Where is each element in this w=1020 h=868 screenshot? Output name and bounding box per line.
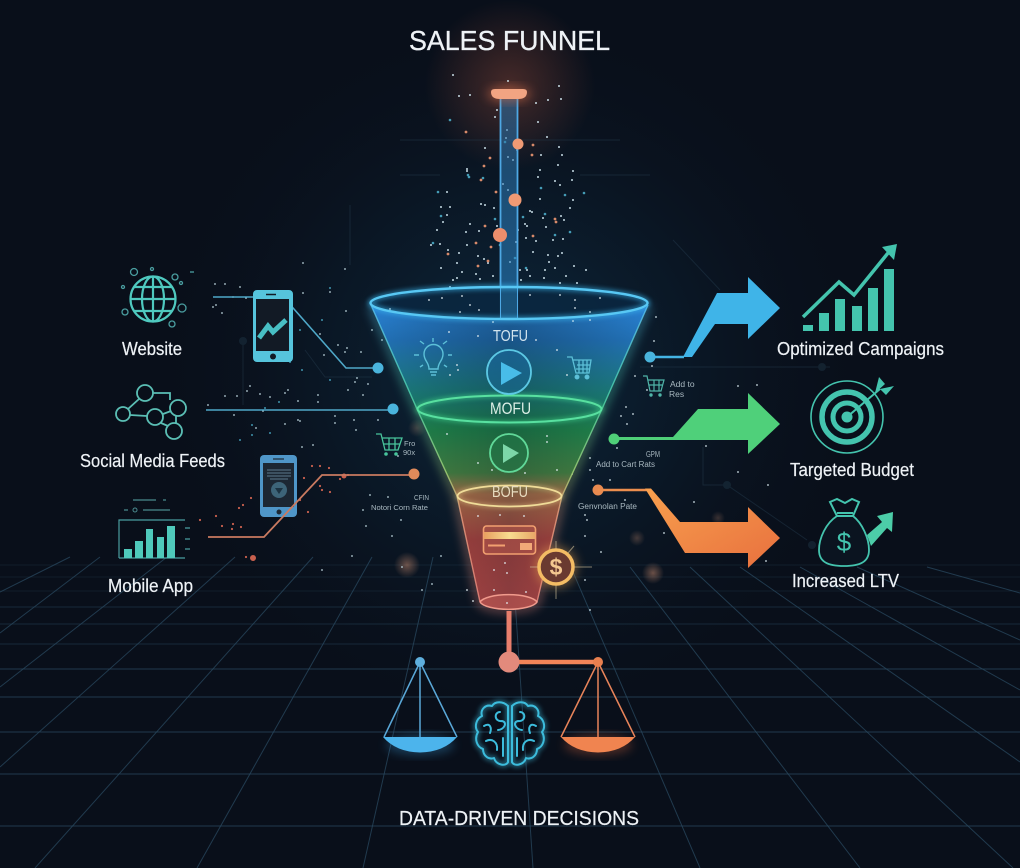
particles: right side [572, 317, 768, 610]
icon: mofu play button [490, 434, 528, 472]
small label: conversion rate: Genvnolan Pate [578, 502, 638, 511]
small label: add to cart rate: GPM [646, 450, 660, 459]
small label: cfin rate [371, 493, 429, 512]
small label: add to cart rate: Add to Cart Rats [596, 460, 655, 469]
tier ring: bofu [458, 486, 562, 506]
small label: add to rate with cart [643, 376, 695, 399]
small label: cart with rate: 90x [403, 448, 415, 457]
particles: left side [200, 263, 441, 590]
label: social media feeds: Social Media Feeds [80, 451, 225, 471]
icon: globe [122, 268, 194, 327]
title: SALES FUNNEL [409, 25, 610, 56]
icon: light bulb [414, 338, 452, 375]
perspective floor grid [0, 557, 1020, 868]
label: optimized campaigns: Optimized Campaigns [777, 339, 944, 359]
icon: credit card [484, 526, 536, 554]
tier ring: mofu [418, 396, 602, 422]
icon: tofu play button [487, 350, 531, 394]
connector and arrow: blue [644, 277, 780, 362]
label: mobile app: Mobile App [108, 576, 193, 596]
soft light spots [394, 419, 725, 584]
connector: website to funnel [213, 297, 384, 374]
icon: phone with message [260, 455, 297, 517]
faint circuit traces [239, 140, 830, 549]
connector: mobile app to funnel [208, 468, 420, 537]
top spout [487, 86, 531, 319]
funnel [370, 287, 648, 609]
icon: target with arrow [811, 377, 894, 453]
label: website: Website [122, 339, 182, 359]
small label: add to cart rate [596, 450, 660, 469]
small label: cfin rate: CFIN [414, 493, 429, 502]
particles: upper column [431, 75, 586, 287]
label: increased ltv: Increased LTV [792, 571, 899, 591]
balance scale [383, 611, 635, 755]
connector: social media feeds to funnel [206, 404, 398, 414]
icon: shopping cart inside funnel [567, 357, 591, 379]
icon: dollar coin: $ [550, 554, 563, 580]
small label: add to rate with cart: Add to [670, 379, 695, 389]
small label: add to rate with cart: Res [669, 389, 684, 399]
small label: cart with rate: Fro [404, 439, 415, 448]
connector and arrow: orange [592, 484, 780, 568]
icon: phone with chart [253, 290, 293, 362]
icon: social network [116, 385, 186, 439]
footer caption: DATA-DRIVEN DECISIONS [399, 808, 639, 830]
small label: cart with rate [376, 434, 415, 457]
icon: money bag with arrow: $ [837, 527, 852, 557]
icon: dollar coin [530, 541, 592, 599]
icon: growth chart [803, 244, 897, 331]
label: mofu: MOFU [490, 399, 531, 418]
icon: mobile app bar chart [119, 500, 190, 558]
connector and arrow: green [608, 393, 780, 454]
left scale pan [383, 657, 457, 755]
icon: brain [476, 702, 544, 765]
tier ring: top of funnel [370, 287, 648, 319]
small label: cfin rate: Notori Corn Rate [371, 503, 428, 512]
label: targeted budget: Targeted Budget [790, 460, 914, 480]
right scale pan [561, 657, 635, 755]
icon: money bag with arrow [819, 499, 893, 566]
label: bofu: BOFU [492, 484, 528, 501]
funnel interior particles [390, 295, 600, 603]
label: tofu: TOFU [493, 328, 528, 345]
